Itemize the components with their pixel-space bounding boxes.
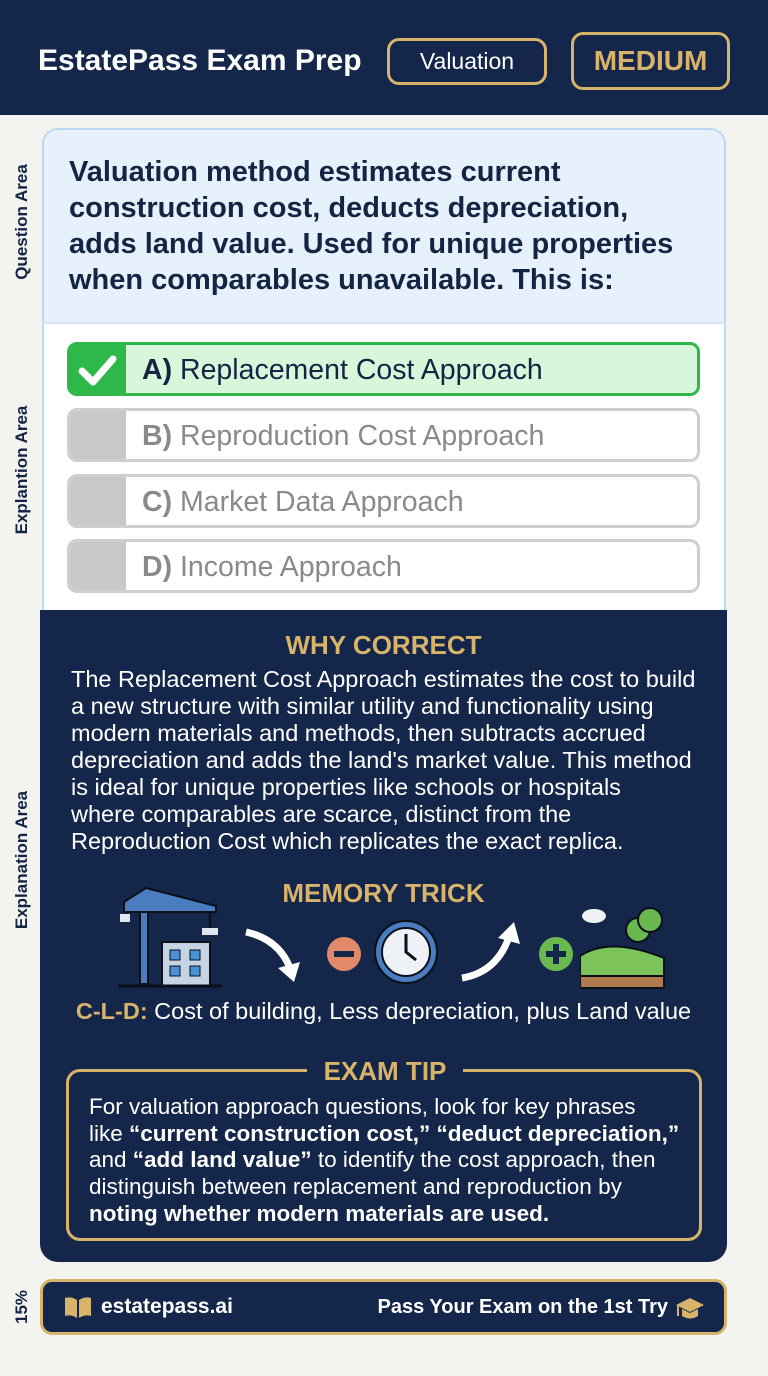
text: why correct: Reproduction Cost which replicates the exact replica. (71, 828, 624, 854)
box: exam tip (66, 1069, 702, 1241)
heading: memory trick: MEMORY TRICK (282, 878, 485, 908)
option B: B) Reproduction Cost Approach (142, 420, 544, 452)
text: why correct: is ideal for unique properties like schools or hospitals (71, 774, 621, 800)
text: why correct (71, 666, 695, 854)
title: EstatePass Exam Prep (38, 44, 362, 77)
pill: topic (387, 38, 547, 85)
text: exam tip: and “add land value” to identify the cost approach, then (89, 1147, 656, 1172)
text: exam tip: For valuation approach questions, look for key phrases (89, 1094, 636, 1119)
text: why correct: depreciation and adds the land's market value. This method (71, 747, 692, 773)
icon: cap (676, 1298, 704, 1318)
option D (67, 539, 700, 593)
icon: land (580, 907, 665, 989)
question text (68, 156, 673, 296)
icon: plus (539, 937, 573, 971)
heading: exam tip: EXAM TIP (324, 1056, 446, 1086)
options area (42, 322, 726, 612)
text: exam tip: like “current construction cost,” “deduct depreciation,” (89, 1121, 679, 1146)
panel: explanation (40, 610, 727, 1262)
icon: crane building (118, 887, 222, 988)
arrow: up (461, 922, 520, 982)
option A correct (67, 342, 700, 396)
pill: difficulty: MEDIUM (594, 45, 707, 76)
footer brand: estatepass.ai (101, 1295, 233, 1318)
side label: explanation area: Explanation Area (12, 791, 31, 929)
side label: question area: Question Area (12, 164, 31, 280)
text: why correct: where comparables are scarce, distinct from the (71, 801, 571, 827)
footer tagline: Pass Your Exam on the 1st Try (378, 1296, 668, 1318)
text: why correct: a new structure with similar utility and functionality using (71, 693, 654, 719)
arrow: down (245, 928, 300, 982)
option D: D) Income Approach (142, 551, 402, 583)
option C: C) Market Data Approach (142, 486, 464, 518)
option B (67, 408, 700, 462)
side label: explantion area: Explantion Area (12, 406, 31, 534)
option C (67, 474, 700, 528)
question text: construction cost, deducts depreciation, (69, 192, 628, 224)
heading: why correct: WHY CORRECT (286, 630, 481, 660)
text: why correct: modern materials and methods, then subtracts accrued (71, 720, 646, 746)
icon: clock (374, 920, 438, 984)
text: exam tip: distinguish between replacement and reproduction by (89, 1174, 622, 1199)
icon: minus (327, 937, 361, 971)
text: exam tip: noting whether modern materials are used. (89, 1201, 549, 1226)
icon: book (65, 1297, 91, 1318)
side label: percent: 15% (12, 1290, 31, 1324)
icon: check (70, 345, 126, 393)
footer (40, 1279, 727, 1335)
option A correct: A) Replacement Cost Approach (142, 354, 543, 386)
text: mnemonic: C-L-D: Cost of building, Less depreciation, plus Land value (76, 998, 691, 1024)
header (0, 0, 768, 115)
pill: topic: Valuation (420, 48, 514, 74)
question text: Valuation method estimates current (69, 156, 561, 188)
question card (42, 128, 726, 323)
text: exam tip (89, 1094, 679, 1226)
question text: adds land value. Used for unique properties (69, 228, 673, 260)
question text: when comparables unavailable. This is: (69, 264, 614, 296)
text: why correct: The Replacement Cost Approach estimates the cost to build (71, 666, 695, 692)
pill: difficulty (571, 32, 730, 90)
